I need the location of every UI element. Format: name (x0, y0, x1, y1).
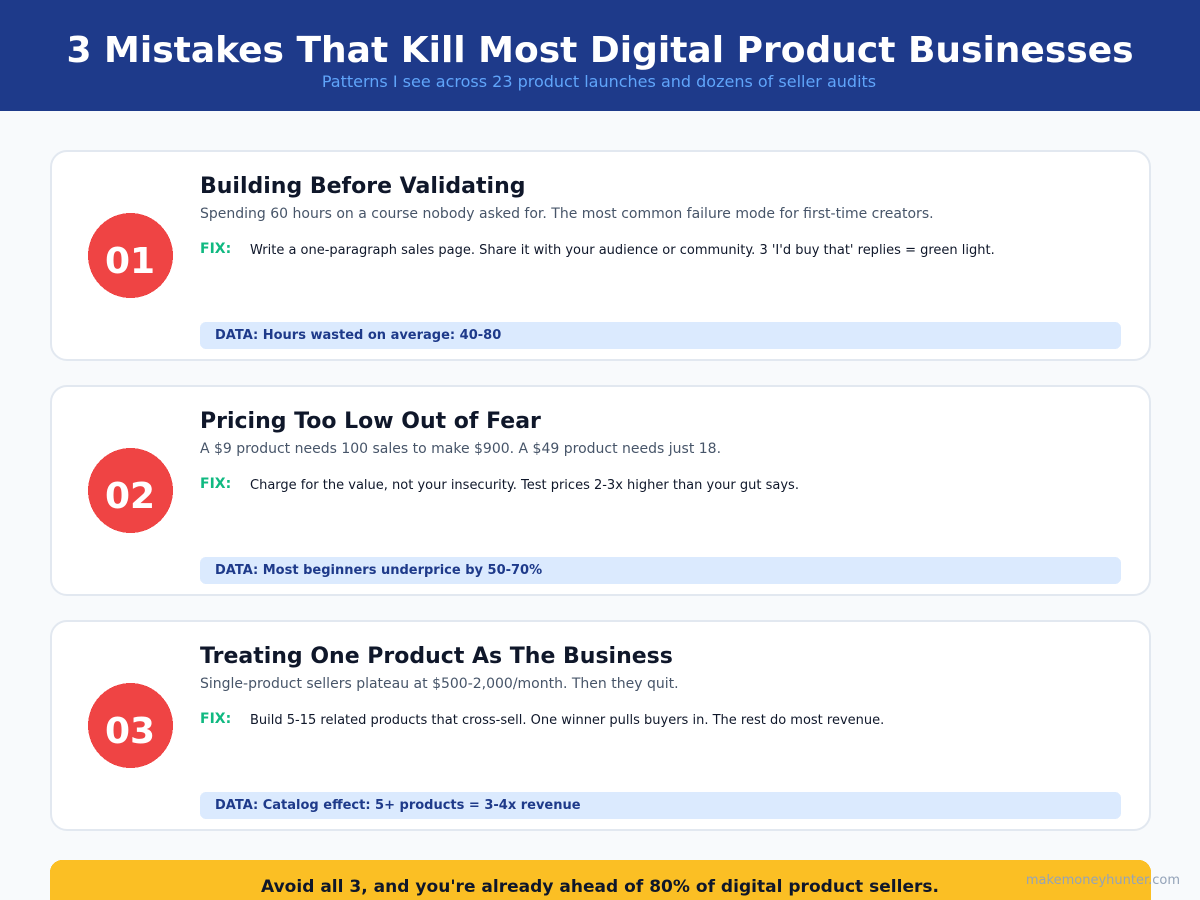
heading: Treating One Product As The Business (200, 644, 673, 669)
description: A $9 product needs 100 sales to make $900. A $49 product needs just 18. (200, 441, 721, 457)
heading: Building Before Validating (200, 174, 526, 199)
data bar: DATA: Most beginners underprice by 50-70% (215, 563, 542, 578)
number badge 03: 03 (105, 711, 155, 752)
title: 3 Mistakes That Kill Most Digital Product Businesses (66, 30, 1134, 71)
description: Single-product sellers plateau at $500-2,000/month. Then they quit. (200, 676, 679, 692)
data bar (200, 322, 1121, 349)
description: Spending 60 hours on a course nobody asked for. The most common failure mode for first-time creators. (200, 206, 934, 222)
number badge 01 (88, 213, 173, 298)
panel: mistake 01 (51, 151, 1150, 360)
fix text: Write a one-paragraph sales page. Share it with your audience or community. 3 'I'd buy that' replies = green light. (250, 243, 995, 258)
fix label: FIX: (200, 711, 231, 727)
heading: Pricing Too Low Out of Fear (200, 409, 541, 434)
number badge 03 (88, 683, 173, 768)
number badge 01: 01 (105, 241, 155, 282)
number badge 02: 02 (105, 476, 155, 517)
data bar: DATA: Catalog effect: 5+ products = 3-4x revenue (215, 798, 581, 813)
number badge 02 (88, 448, 173, 533)
callout: footer banner (50, 860, 1151, 900)
fix label: FIX: (200, 241, 231, 257)
fix text: Build 5-15 related products that cross-sell. One winner pulls buyers in. The rest do most revenue. (250, 713, 884, 728)
data bar: DATA: Hours wasted on average: 40-80 (215, 328, 501, 343)
panel: mistake 02 (51, 386, 1150, 595)
fix label: FIX: (200, 476, 231, 492)
subtitle: Patterns I see across 23 product launches and dozens of seller audits (322, 72, 876, 91)
callout: footer banner: Avoid all 3, and you're already ahead of 80% of digital product sellers. (261, 877, 939, 897)
panel: mistake 03 (51, 621, 1150, 830)
watermark: makemoneyhunter.com (1026, 873, 1180, 888)
data bar (200, 792, 1121, 819)
data bar (200, 557, 1121, 584)
header banner (0, 0, 1200, 111)
fix text: Charge for the value, not your insecurity. Test prices 2-3x higher than your gut says. (250, 478, 799, 493)
